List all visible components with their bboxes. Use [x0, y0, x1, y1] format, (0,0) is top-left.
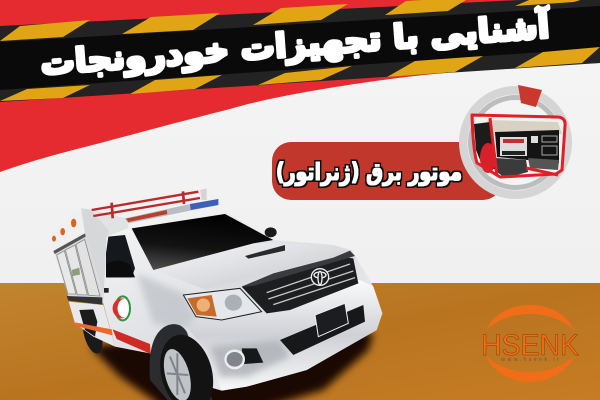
red side stripe [113, 329, 151, 354]
label pill [272, 142, 502, 200]
rescue pickup truck [50, 188, 382, 400]
hazard tape [0, 0, 600, 102]
ground shadow [90, 323, 373, 400]
license plate [315, 303, 348, 337]
red crescent emblem [113, 296, 130, 320]
wheel arch and front wheel [150, 324, 221, 400]
far mirror [265, 227, 277, 237]
box warning lights [52, 219, 76, 242]
red segment [518, 85, 542, 107]
grille [242, 251, 358, 313]
generator [472, 115, 565, 178]
door handle [104, 288, 109, 293]
toyota logo [311, 269, 329, 285]
red frame [472, 115, 565, 177]
hsenk logo [481, 305, 579, 382]
logo url: www.hsenk.ir [501, 357, 560, 363]
logo wordmark: HSENK [481, 329, 579, 362]
hood scoop [245, 245, 285, 259]
orange side stripe [75, 322, 113, 335]
emergency light bar [125, 199, 218, 223]
bumper shade [210, 340, 290, 377]
headlight [183, 288, 262, 320]
fog lamp [224, 348, 263, 369]
lower grille [280, 305, 365, 355]
red banner shape [0, 0, 600, 172]
rear wheel [79, 312, 106, 356]
windshield [132, 214, 273, 270]
upper yellow stripes [0, 0, 590, 41]
title: آشنایی با تجهیزات خودرونجات [39, 5, 551, 84]
pill text: موتور برق (ژنراتور) [276, 158, 462, 186]
hood [153, 243, 350, 290]
side window [106, 235, 135, 277]
logo arcs [486, 305, 575, 382]
fender shade [137, 273, 197, 330]
lower yellow stripes [0, 47, 600, 101]
roof rack [92, 188, 207, 218]
cab and body [103, 213, 382, 391]
lower rear body [69, 302, 115, 347]
rescue box body [50, 208, 137, 305]
side mirror [106, 261, 135, 277]
rear wheel well [79, 309, 97, 337]
front bumper [183, 280, 382, 391]
generator badge [459, 85, 572, 199]
ground [0, 283, 600, 400]
